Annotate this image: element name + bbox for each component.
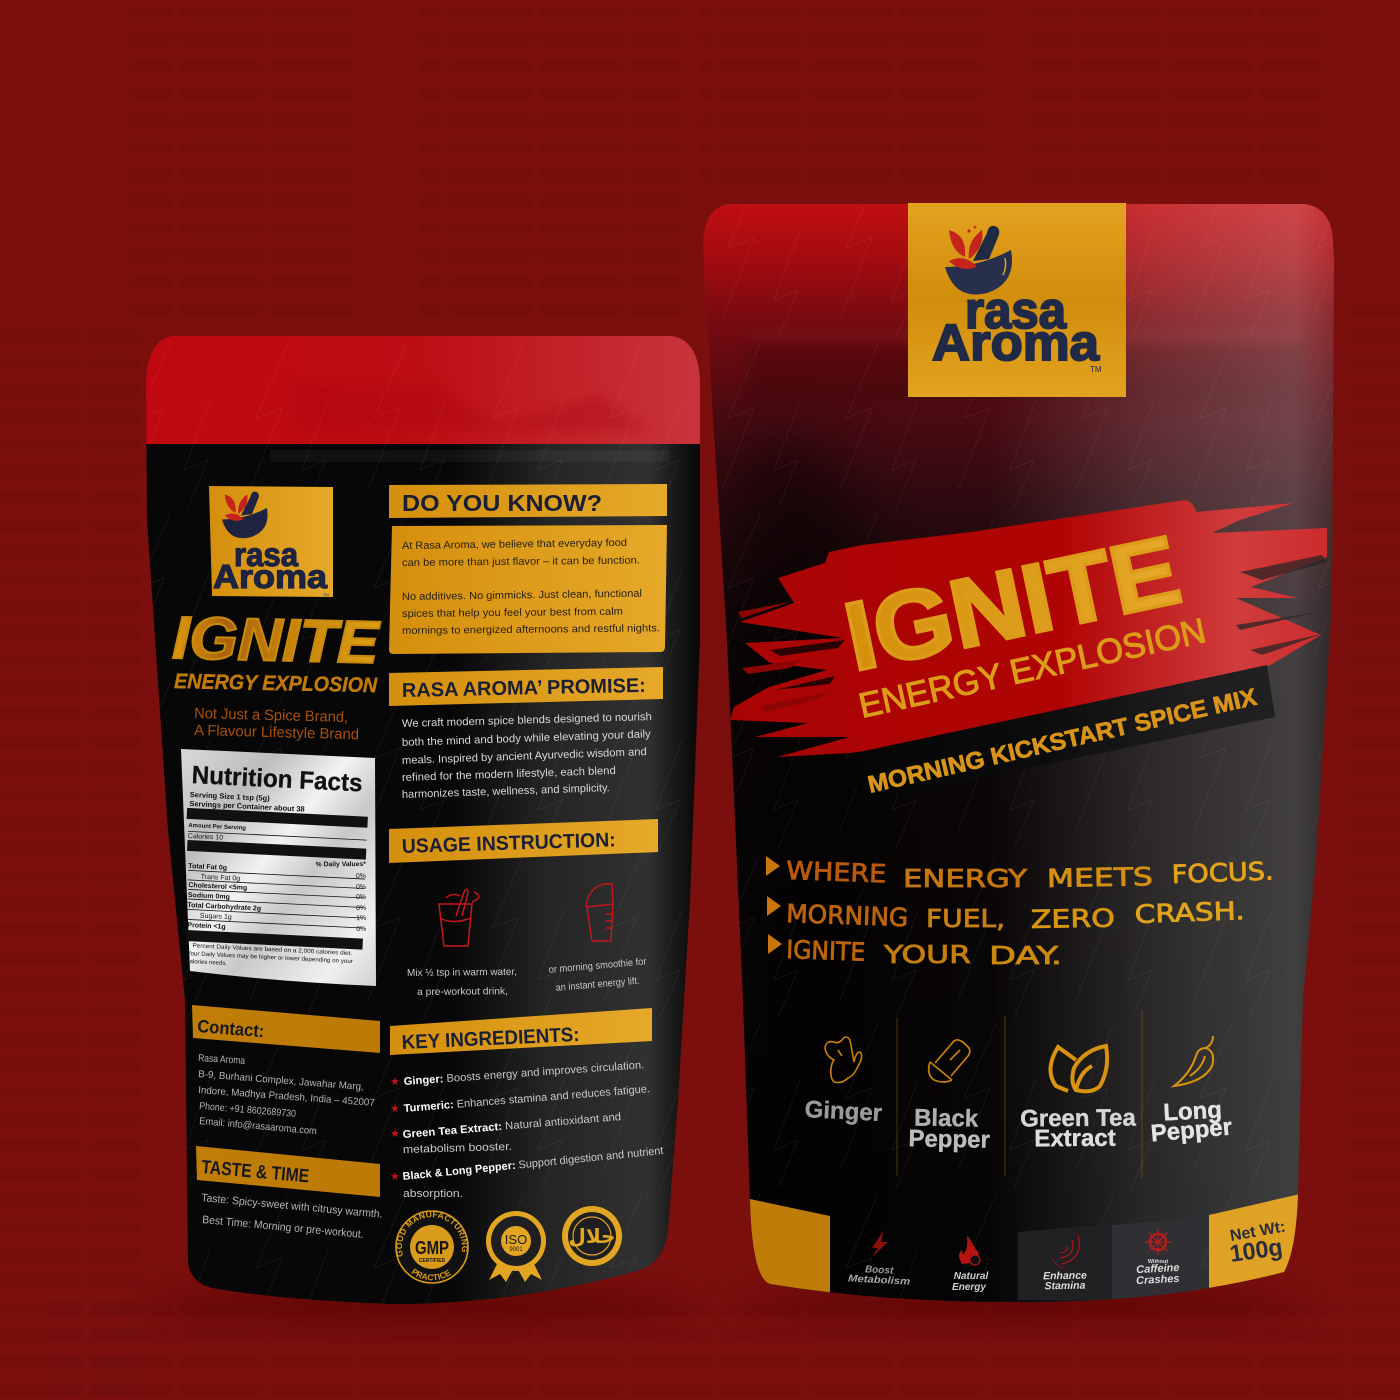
promise body: meals. Inspired by ancient Ayurvedic wisdom and [402,746,647,767]
slogan list: ZERO [1031,904,1115,934]
usage captions: a pre-workout drink, [417,986,508,998]
GMP badge: CERTIFIED [419,1258,446,1264]
usage heading [389,819,658,863]
stamina badge background [1018,1224,1112,1300]
slogan list: YOUR [883,940,971,969]
nutrition facts panel: Sodium 0mg [188,892,230,901]
benefit: boost metabolism: Metabolism [848,1273,910,1288]
benefit: caffeine crashes: Without [1148,1259,1168,1265]
back logo: TM [323,592,329,597]
icon: glass with spoon [439,889,479,946]
slogan list: WHERE [786,856,887,888]
benefit: caffeine crashes: Caffeine [1136,1262,1180,1276]
icon: pepper shaker [928,1040,970,1094]
nutrition facts panel: Trans Fat 0g [201,874,240,883]
contact heading [192,1005,380,1053]
promise body [402,711,652,801]
benefit: caffeine crashes [1136,1229,1180,1287]
contact details: Rasa Aroma [198,1053,246,1067]
contact details [198,1053,376,1137]
front pouch [700,200,1340,1310]
benefit: natural energy: Energy [952,1282,986,1293]
red brush stroke [730,500,1327,757]
key ingredients list: ★ [390,1076,400,1088]
GMP badge: GOOD MANUFACTURING [396,1212,468,1256]
key ingredients list: ★ [390,1103,400,1115]
benefit: enhance stamina: Enhance [1043,1270,1087,1282]
key ingredients list: ★ [390,1171,400,1183]
GMP badge [395,1210,469,1284]
back logo: Aroma [213,558,328,595]
icon: mortar and pestle [945,226,1012,295]
ISO badge: 9001 [509,1247,523,1253]
nutrition facts panel: Servings per Container about 38 [189,799,305,814]
nutrition facts panel: 0% [356,905,366,912]
ingredient labels: Pepper [1150,1114,1233,1148]
icon: ginger [825,1037,862,1082]
taste and time heading: TASTE & TIME [201,1157,310,1187]
halal badge: حلال [569,1224,615,1248]
promise body: harmonizes taste, wellness, and simplicity. [402,782,610,801]
back logo: rasa [234,536,299,573]
benefit: boost metabolism [848,1230,910,1288]
front IGNITE title: IGNITE [836,515,1189,692]
front logo panel [908,203,1126,397]
nutrition facts panel: Calories 10 [188,833,223,842]
slogan list: ENERGY [903,864,1028,893]
contact details: Phone: +91 8602689730 [199,1101,297,1120]
caffeine badge background [1112,1218,1201,1300]
nutrition facts panel [179,749,376,986]
slogan list [766,856,1274,970]
usage captions: an instant energy lift. [555,976,640,994]
tagline [194,705,359,743]
ingredient labels [804,1096,1233,1154]
do you know heading: DO YOU KNOW? [402,490,602,516]
benefit: boost metabolism: Boost [865,1264,894,1277]
nutrition facts panel: 0% [356,894,366,901]
key ingredients list: Black & Long Pepper: Support digestion and nutrient [402,1145,664,1183]
nutrition facts panel: 1% [356,915,366,922]
front logo panel: rasa [965,282,1067,340]
promise body: We craft modern spice blends designed to nourish [402,711,652,730]
net weight block [1209,1194,1300,1290]
benefit: natural energy: Natural [954,1271,988,1282]
back IGNITE title: IGNITE [172,604,381,676]
nutrition facts panel: Amount Per Serving [188,823,246,832]
key ingredients list: absorption. [403,1188,463,1200]
nutrition facts panel: Serving Size 1 tsp (5g) [190,790,270,803]
key ingredients list: ★ [390,1128,400,1140]
key ingredients list: Ginger: Boosts energy and improves circulation. [403,1059,645,1088]
slogan list: MORNING [786,899,909,932]
icon: shaker bottle [586,884,613,941]
ingredient labels: Extract [1034,1125,1116,1152]
do you know body: mornings to energized afternoons and restful nights. [402,622,660,637]
key ingredients heading [390,1008,652,1055]
dark ribbon [850,665,1275,802]
key ingredients list: metabolism booster. [403,1141,512,1156]
key ingredients list: Turmeric: Enhances stamina and reduces fatigue. [403,1083,650,1115]
GMP badge: PRACTICE [411,1268,452,1280]
promise body: both the mind and body while elevating your daily [402,728,651,749]
do you know body: At Rasa Aroma, we believe that everyday food [402,537,627,552]
nutrition facts panel: Percent Daily Values are based on a 2,000 calories diet. [192,943,353,957]
usage captions: Mix ½ tsp in warm water, [407,967,517,979]
slogan list: MEETS [1047,862,1153,893]
do you know body [389,525,667,654]
nutrition facts panel: calories needs. [186,959,227,967]
contact heading: Contact: [197,1016,265,1041]
ingredient labels: Green Tea [1020,1104,1137,1133]
do you know body: spices that help you feel your best from calm [402,606,623,620]
back subtitle: ENERGY EXPLOSION [174,670,378,697]
benefit: caffeine crashes: Crashes [1136,1273,1180,1287]
usage captions: or morning smoothie for [548,956,647,976]
contact details: Indore, Madhya Pradesh, India – 452007 [198,1085,376,1109]
nutrition facts panel: 0% [356,884,366,891]
orange bottom left block [750,1199,830,1292]
promise body: refined for the modern lifestyle, each blend [402,765,616,784]
halal badge [562,1206,622,1266]
do you know heading [389,484,667,518]
ISO badge: ISO [505,1232,527,1247]
icon: mortar and pestle [222,492,268,538]
ingredient labels: Black [914,1104,979,1133]
key ingredients heading: KEY INGREDIENTS: [401,1024,580,1054]
usage captions [407,956,647,998]
promise heading: RASA AROMA’ PROMISE: [402,675,646,702]
icon: long pepper [1174,1036,1213,1086]
tagline: Not Just a Spice Brand, [194,705,348,726]
nutrition facts panel: % Daily Values* [316,861,366,868]
taste and time details: Best Time: Morning or pre-workout. [202,1214,364,1241]
taste and time heading [196,1146,380,1197]
slogan list: CRASH. [1134,896,1245,929]
nutrition facts panel: 0% [356,926,366,933]
nutrition facts panel: 0% [356,873,366,880]
GMP badge: GMP [415,1238,449,1258]
key ingredients list [390,1059,664,1200]
ingredient labels: Ginger [804,1096,883,1127]
ISO badge [486,1211,546,1282]
nutrition heading: Nutrition Facts [191,761,363,797]
contact details: Email: info@rasaaroma.com [199,1116,317,1137]
ingredient labels: Pepper [908,1125,990,1154]
taste and time details [201,1192,383,1241]
slogan list: IGNITE [786,935,866,967]
taste and time details: Taste: Spicy-sweet with citrusy warmth. [201,1192,383,1221]
benefit: natural energy [952,1235,988,1293]
do you know body: can be more than just flavor – it can be function. [402,555,640,569]
nutrition facts panel: Sugars 1g [200,913,232,921]
nutrition facts panel: Total Carbohydrate 2g [187,902,261,913]
nutrition facts panel: Your Daily Values may be higher or lower depending on your [187,951,353,965]
net weight label [1228,1218,1287,1268]
ingredient labels: Long [1163,1096,1223,1127]
front logo panel: Aroma [932,314,1100,371]
contact details: B-9, Burhani Complex, Jawahar Marg, [198,1069,364,1093]
back logo [209,486,333,597]
key ingredients list: Green Tea Extract: Natural antioxidant and [402,1111,622,1141]
ingredient dividers [897,1010,1142,1178]
usage heading: USAGE INSTRUCTION: [401,829,616,858]
back pouch [146,336,700,1304]
slogan list: FOCUS. [1171,856,1274,889]
benefit: enhance stamina: Stamina [1044,1280,1086,1292]
nutrition facts panel: Total Fat 0g [188,863,227,872]
promise heading [389,667,663,706]
tagline: A Flavour Lifestyle Brand [194,722,359,743]
nutrition facts panel: Cholesterol <5mg [188,882,247,892]
slogan list: DAY. [989,941,1062,970]
net weight label: Net Wt: [1229,1218,1287,1245]
do you know body: No additives. No gimmicks. Just clean, functional [402,588,642,603]
net weight label: 100g [1228,1234,1284,1268]
front subtitle: ENERGY EXPLOSION [855,611,1209,726]
nutrition facts panel: Protein <1g [187,922,226,931]
benefit: enhance stamina [1043,1235,1087,1292]
front logo panel: TM [1090,365,1102,374]
icon: green tea leaves [1050,1046,1107,1091]
tagline ribbon text: MORNING KICKSTART SPICE MIX [865,684,1259,799]
slogan list: FUEL, [926,904,1005,933]
